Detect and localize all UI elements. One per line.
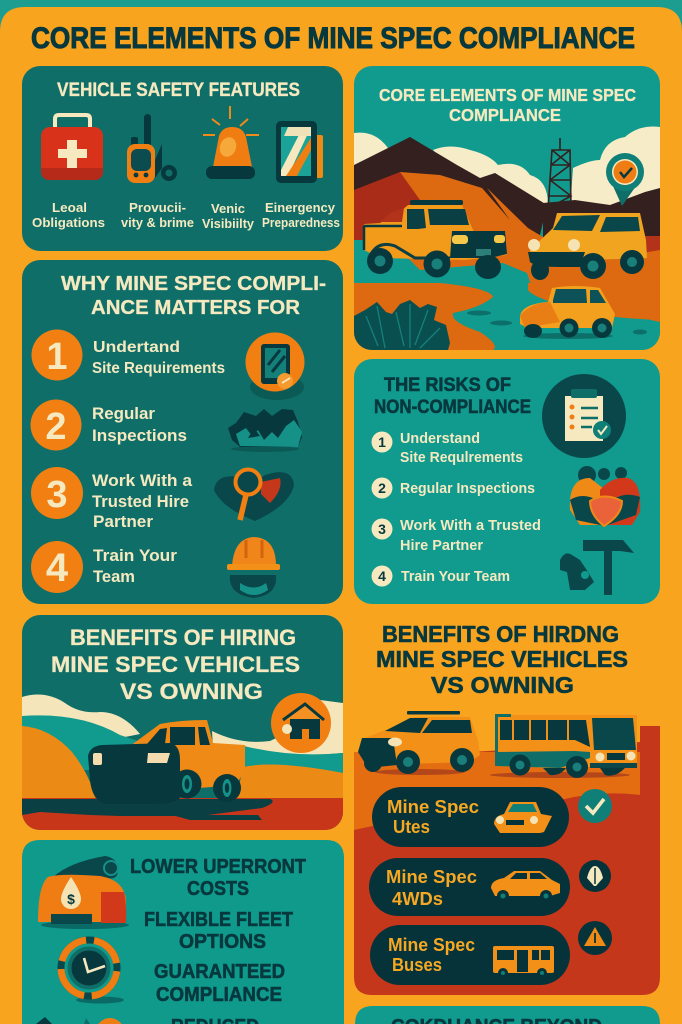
step 2 text: Regular (92, 404, 155, 423)
list item 4 (372, 566, 510, 586)
vehicle: bus (490, 714, 637, 778)
pill: mine spec buses: Buses (392, 955, 442, 975)
vehicle: orange 4WD (358, 711, 480, 775)
icon: first aid kit (41, 115, 103, 180)
step 1 text: Undertand (93, 339, 180, 356)
pill: mine spec 4WDs: 4WDs (392, 888, 443, 909)
pill: mine spec buses (370, 925, 570, 985)
step 4 number: 4 (46, 546, 69, 590)
heading: benefits of hiring: BENEFITS OF HIRING (70, 625, 296, 650)
vehicle: orange ute (364, 200, 507, 279)
label: vehicle visibility: Venic (211, 201, 245, 216)
list item 3: Hire Partner (400, 538, 483, 554)
list item 1: Site Requlrements (400, 450, 523, 466)
illustration: landscape with ute (22, 695, 343, 830)
vehicle: small yellow car (520, 286, 615, 339)
list item 4: 4 (378, 568, 386, 584)
icon: warning beacon (203, 106, 259, 179)
icon: cost machine: $ (67, 891, 75, 907)
pill: mine spec 4WDs (369, 858, 570, 916)
benefit: flexible fleet options: OPTIONS (179, 930, 266, 953)
label: legal obligations: Obligations (32, 215, 105, 230)
step 2 text (92, 404, 187, 445)
label: productivity: Provucii- (129, 200, 186, 215)
label: emergency preparedness (262, 200, 340, 230)
heading: benefits of hiring (51, 625, 300, 704)
panel: risks of non-compliance (354, 359, 660, 604)
icon: caution badge (579, 860, 611, 892)
icon: clock gauge (57, 936, 124, 1004)
list item 3 (372, 518, 541, 554)
step 2 number: 2 (45, 406, 67, 448)
icon: cost machine (38, 856, 129, 929)
icon: house badge (271, 693, 331, 753)
benefit: guaranteed compliance (154, 960, 285, 1006)
icon: rocks and smoke (228, 409, 302, 452)
benefit: flexible fleet options: FLEXIBLE FLEET (144, 908, 293, 931)
heading: vehicle safety features: VEHICLE SAFETY FEATURES (57, 79, 300, 101)
step 1 text: Site Requirements (92, 360, 225, 377)
list item 2 (372, 478, 535, 498)
panel: vehicle safety features (22, 66, 343, 251)
pill: mine spec utes: Mine Spec (387, 796, 479, 817)
list item 2: Regular Inspections (400, 481, 535, 497)
benefit: lower upfront costs (130, 855, 306, 900)
heading: benefits of hiring: MINE SPEC VEHICLES (51, 652, 300, 677)
step 2 number (30, 400, 82, 450)
step 1 number (32, 330, 82, 380)
step 3 text: Partner (93, 512, 153, 531)
icon: check badge (578, 789, 612, 823)
heading: benefits of hiring vs owning (376, 621, 628, 698)
label: vehicle visibility: Visibiilty (202, 216, 255, 231)
step 4 number (31, 541, 83, 593)
icon: location pin check (606, 153, 644, 206)
panel: benefits list (22, 840, 344, 1024)
illustration: shrubs (354, 300, 450, 350)
illustration: headframe tower (548, 138, 571, 210)
icon: hard hat worker (227, 537, 280, 598)
heading: risks: NON-COMPLIANCE (374, 396, 531, 418)
pill: mine spec utes (372, 787, 569, 847)
step 3 number (31, 467, 83, 519)
label: legal obligations: Leoal (52, 200, 87, 215)
icon: small bus (493, 946, 554, 978)
benefit: guaranteed compliance: GUARANTEED (154, 960, 285, 983)
label: emergency preparedness: Preparedness (262, 215, 340, 230)
illustration: mine site with vehicles (354, 126, 660, 350)
step 4 text: Train Your (93, 546, 177, 565)
heading: why compliance matters: WHY MINE SPEC COMPLI- (61, 272, 326, 295)
list item 4: Train Your Team (401, 569, 510, 585)
step 3 number: 3 (46, 474, 68, 516)
benefit: guaranteed compliance: COMPLIANCE (156, 983, 282, 1006)
icon: ute front (494, 802, 552, 833)
pill: mine spec buses: Mine Spec (388, 935, 475, 955)
heading: benefits of hiring vs owning: BENEFITS OF HIRDNG (382, 621, 619, 647)
step 3 text: Work With a (92, 471, 193, 490)
label: productivity: vity & brime (121, 215, 194, 230)
panel: why mine spec compliance matters (22, 260, 343, 604)
icon: clipboard badge (542, 374, 626, 458)
heading: core elements (379, 85, 636, 125)
label: productivity (121, 200, 194, 230)
icon: warning badge (578, 921, 612, 955)
vehicle: orange SUV (528, 213, 647, 280)
panel: vehicle types (354, 711, 660, 995)
heading: core elements: CORE ELEMENTS OF MINE SPEC (379, 85, 636, 105)
panel: compliance beyond (355, 1006, 660, 1024)
icon: magnifier and heart (214, 470, 294, 521)
list item 1: Understand (400, 431, 480, 447)
heading: core elements: COMPLIANCE (449, 105, 561, 125)
heading: why compliance matters: ANCE MATTERS FOR (91, 296, 300, 319)
icon: tablet on orange circle (246, 332, 304, 400)
heading: benefits of hiring: VS OWNING (120, 679, 263, 704)
step 3 text (92, 471, 193, 531)
benefit: lower upfront costs: COSTS (187, 877, 249, 900)
vehicle: orange ute (88, 720, 245, 804)
icon: two-way radio (127, 114, 177, 183)
list item 3: Work With a Trusted (400, 518, 541, 534)
list item 1: 1 (378, 434, 386, 450)
step 3 text: Trusted Hire (92, 492, 189, 511)
step 1 text (92, 339, 225, 377)
icon: tablet (276, 121, 323, 183)
icon: partly visible reduced costs (36, 1017, 124, 1024)
benefit: lower upfront costs: LOWER UPERRONT (130, 855, 306, 878)
list item 1 (372, 431, 523, 466)
heading: risks (374, 374, 531, 418)
label: emergency preparedness: Einergency (265, 200, 336, 215)
list item 2: 2 (378, 480, 386, 496)
heading: benefits of hiring vs owning: MINE SPEC VEHICLES (376, 646, 628, 672)
heading: why compliance matters (61, 272, 326, 319)
pill: mine spec 4WDs: Mine Spec (386, 866, 477, 887)
pill: mine spec utes: Utes (393, 817, 430, 837)
step 1 number: 1 (46, 336, 68, 378)
step 4 text: Team (93, 567, 135, 586)
step 4 text (93, 546, 177, 586)
icon: hammer and gear (560, 540, 634, 595)
list item 3: 3 (378, 521, 386, 537)
panel: benefits scene (22, 615, 343, 830)
panel: core elements scene (354, 66, 660, 350)
label: legal obligations (32, 200, 105, 230)
icon: sedan (491, 871, 560, 902)
label: vehicle visibility (202, 201, 255, 231)
heading: benefits of hiring vs owning: VS OWNING (431, 672, 574, 698)
benefit: flexible fleet options (144, 908, 293, 953)
step 2 text: Inspections (92, 426, 187, 445)
heading: risks: THE RISKS OF (384, 374, 511, 396)
icon: people with heart (570, 466, 640, 526)
